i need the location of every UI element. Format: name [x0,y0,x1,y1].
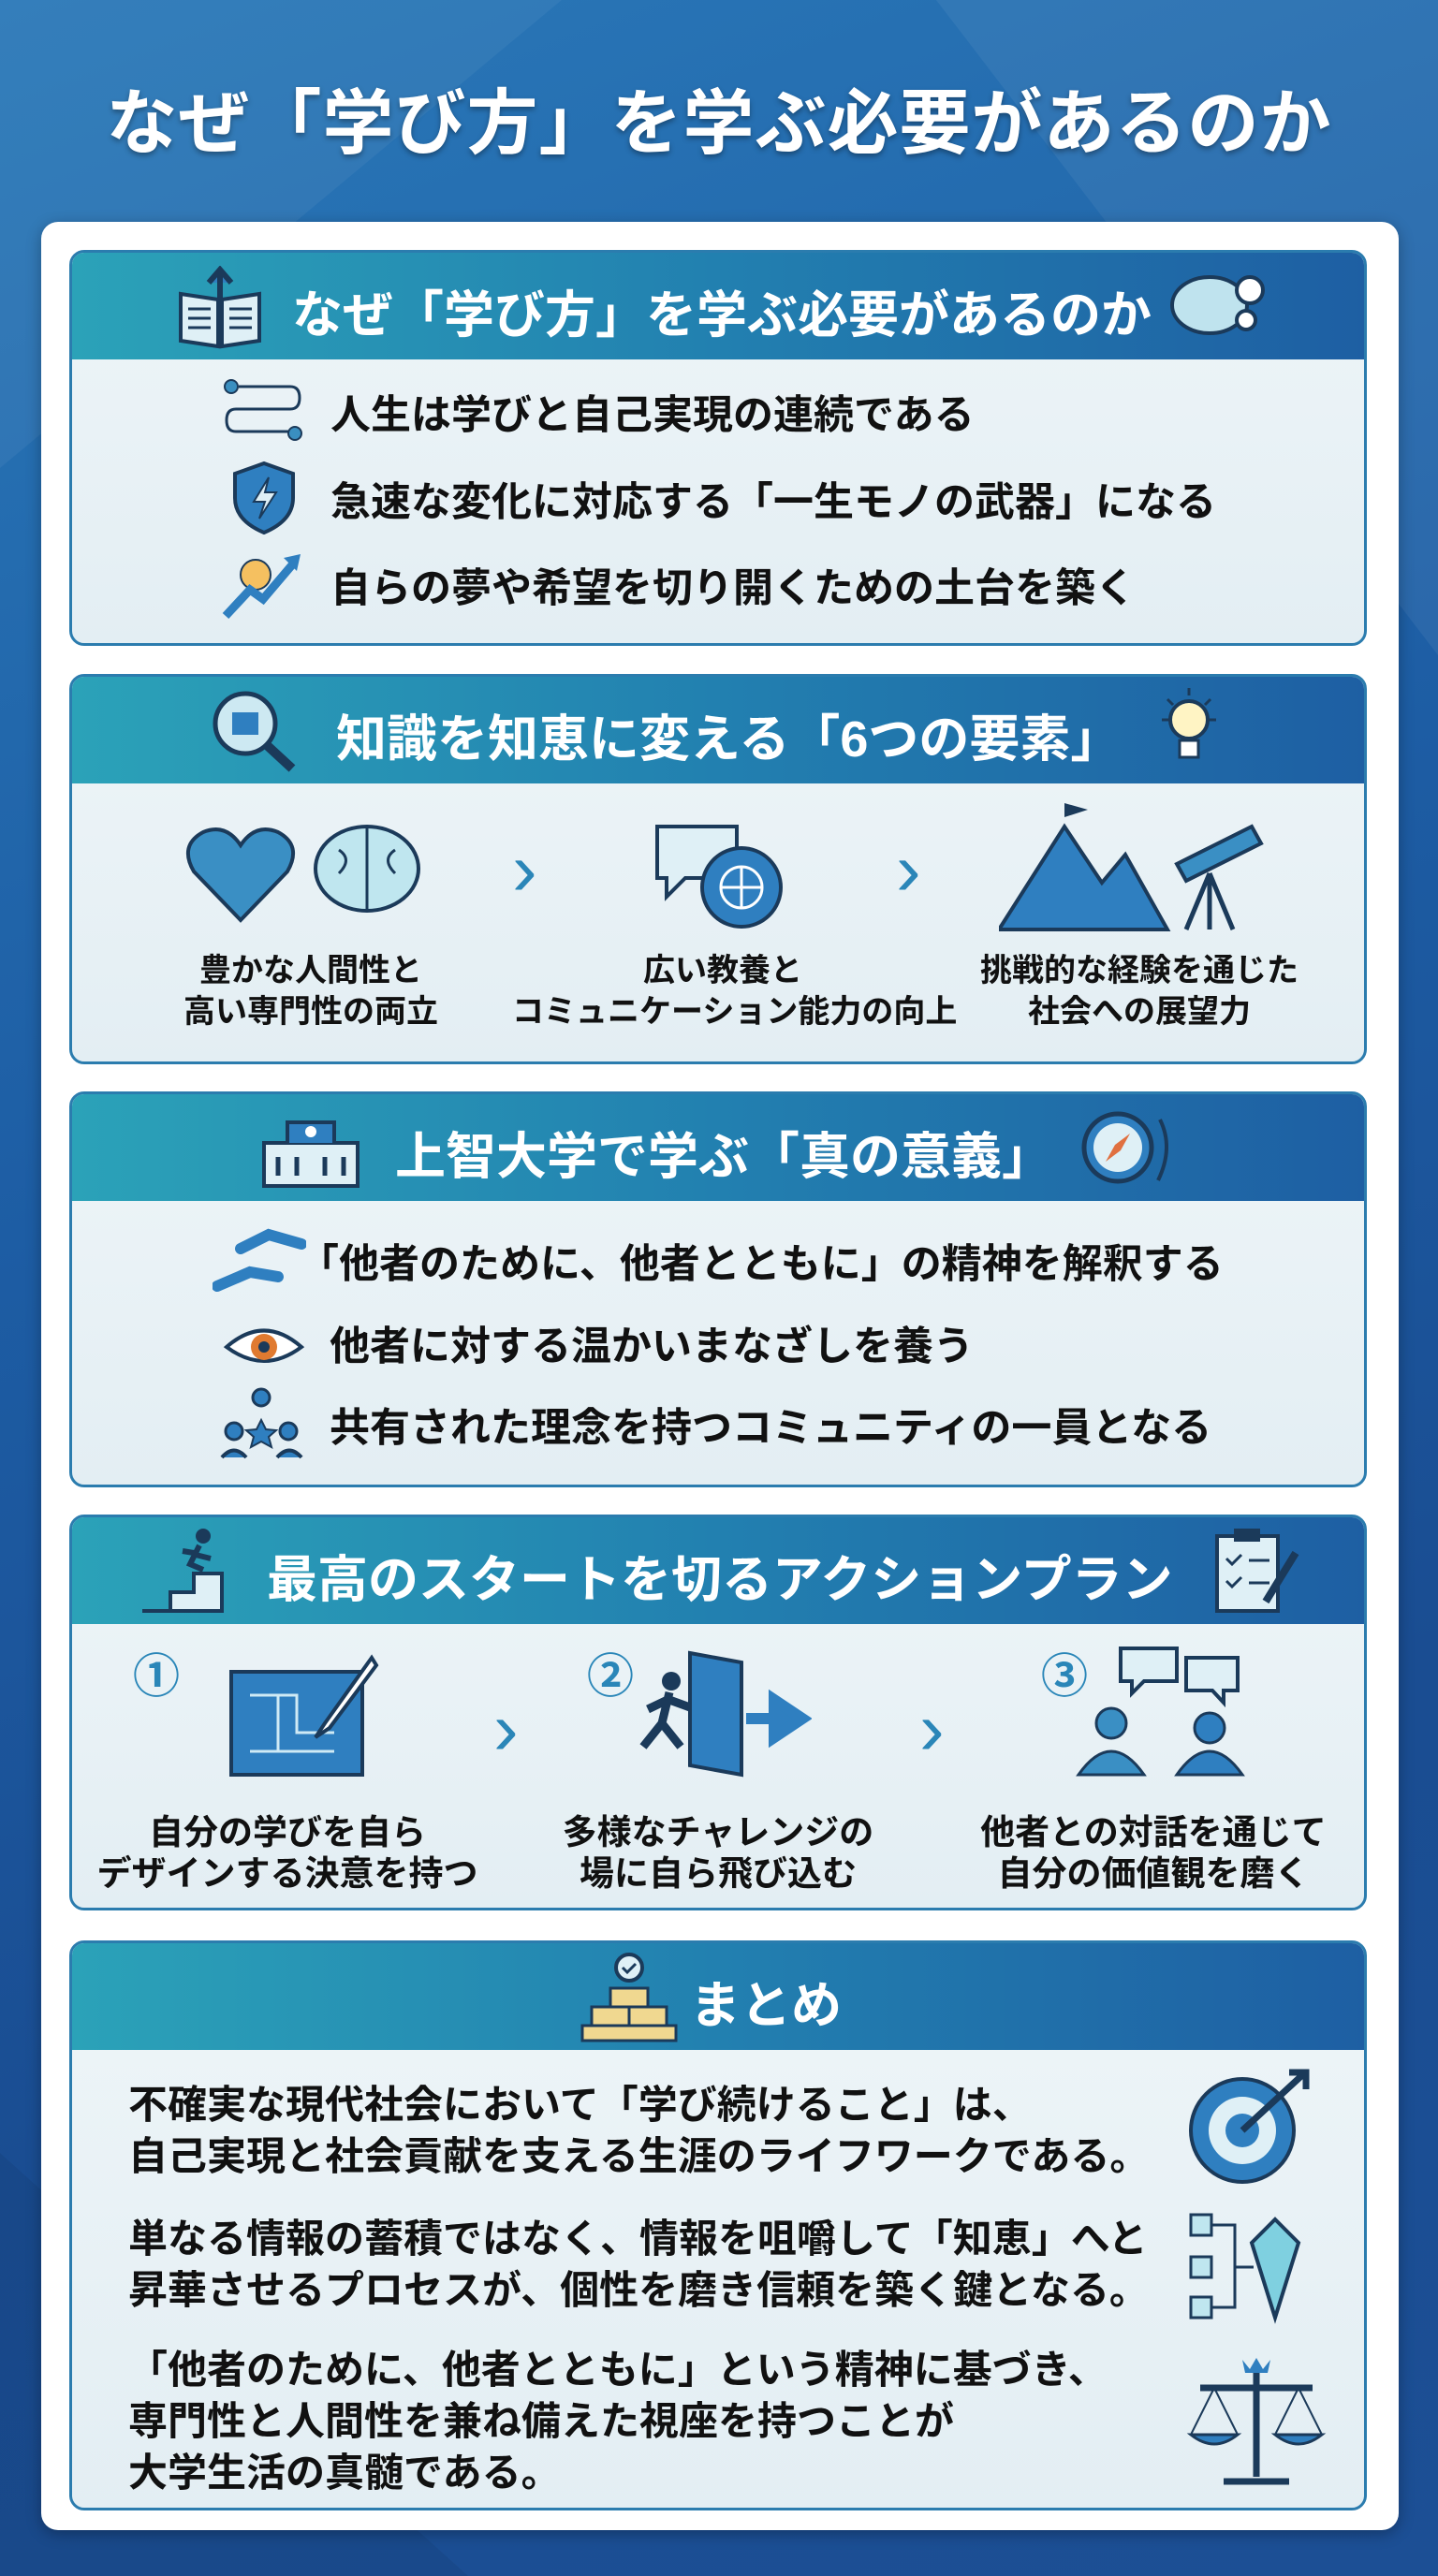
panel: summary [69,1940,1367,2510]
item: eye: 他者に対する温かいまなざしを養う [330,1325,974,1369]
paragraph 1: 自己実現と社会貢献を支える生涯のライフワークである。 [128,2134,1149,2178]
header bar [72,677,1364,783]
element column 1 [183,825,438,1030]
step 2: 場に自ら飛び込む [580,1854,857,1893]
element column 2: 広い教養と [643,953,802,988]
paragraph 2: 昇華させるプロセスが、個性を磨き信頼を築く鍵となる。 [128,2268,1149,2312]
icon: blueprint pencil [229,1654,378,1777]
icon: book [179,266,261,348]
paragraph 3 [128,2348,1108,2495]
panel: action plan [69,1515,1367,1910]
paragraph 1: 不確実な現代社会において「学び続けること」は、 [128,2083,1032,2127]
icon: door runner [640,1651,812,1777]
element column 2 [512,825,957,1030]
header bar: 最高のスタートを切るアクションプラン [267,1552,1173,1608]
step 1: ① [133,1650,180,1703]
arrow: › [493,1687,519,1770]
icon: compass [1082,1112,1168,1183]
paragraph 2: 単なる情報の蓄積ではなく、情報を咀嚼して「知恵」へと [128,2217,1148,2261]
header bar: なぜ「学び方」を学ぶ必要があるのか [292,287,1152,344]
step 3: 他者との対話を通じて [980,1813,1327,1852]
header bar: 上智大学で学ぶ「真の意義」 [395,1129,1052,1185]
item 3 [223,554,1136,619]
element column 1: 豊かな人間性と [199,953,422,988]
item 2 [233,461,1216,535]
icon: mountain and telescope [999,803,1264,931]
step 2: ② [587,1650,634,1703]
item: hands [213,1228,1224,1292]
arrow: › [512,827,537,911]
step 1 [97,1650,477,1893]
item: community [221,1387,1211,1458]
icon: magnifier [213,691,296,771]
paragraph 1 [128,2083,1149,2178]
icon: heart and brain [185,825,420,923]
step 1: デザインする決意を持つ [97,1854,477,1893]
panel: six elements [69,674,1367,1064]
icon: crystal flow [1189,2213,1301,2323]
icon: university building [262,1120,360,1188]
item: community: 共有された理念を持つコミュニティの一員となる [330,1406,1211,1451]
element column 2: コミュニケーション能力の向上 [512,994,957,1030]
step 2 [563,1650,873,1893]
item 1: 人生は学びと自己実現の連続である [330,393,975,438]
step 2: 多様なチャレンジの [563,1813,873,1852]
icon: speech and globe [655,825,783,929]
item 1 [224,379,975,441]
header bar [72,1943,1364,2050]
title: なぜ「学び方」を学ぶ必要があるのか [107,84,1331,164]
item 3: 自らの夢や希望を切り開くための土台を築く [330,566,1136,611]
item: hands: 「他者のために、他者とともに」の精神を解釈する [299,1242,1224,1287]
header bar: 知識を知恵に変える「6つの要素」 [336,711,1121,768]
header bar [72,1517,1364,1624]
step 1: 自分の学びを自ら [149,1813,426,1852]
paragraph 2 [128,2217,1149,2312]
arrow: › [896,827,921,911]
icon: stairs runner [142,1529,224,1613]
panel: why learn how to learn [69,250,1367,646]
element column 3: 挑戦的な経験を通じた [980,953,1299,988]
step 3: 自分の価値観を磨く [998,1854,1309,1893]
step 3: ③ [1041,1650,1088,1703]
icon: dialogue people [1076,1647,1245,1777]
icon: target [1189,2069,1309,2184]
step 3 [980,1647,1327,1893]
icon: scales [1187,2358,1326,2484]
header bar [72,1094,1364,1201]
panel: sophia meaning [69,1091,1367,1487]
element column 3 [980,803,1299,1030]
paragraph 3: 専門性と人間性を兼ね備えた視座を持つことが [128,2399,954,2443]
icon: bulb [1162,688,1216,758]
icon: brain gear [1170,275,1265,335]
element column 1: 高い専門性の両立 [183,994,438,1030]
paragraph 3: 大学生活の真髄である。 [128,2451,561,2495]
icon: clipboard [1215,1529,1299,1613]
item 2: 急速な変化に対応する「一生モノの武器」になる [330,480,1216,525]
paragraph 3: 「他者のために、他者とともに」という精神に基づき、 [128,2348,1108,2392]
element column 3: 社会への展望力 [1028,994,1251,1030]
icon: blocks check [580,1953,678,2042]
header bar [72,253,1364,359]
arrow: › [919,1687,945,1770]
header bar: まとめ [690,1978,842,2034]
